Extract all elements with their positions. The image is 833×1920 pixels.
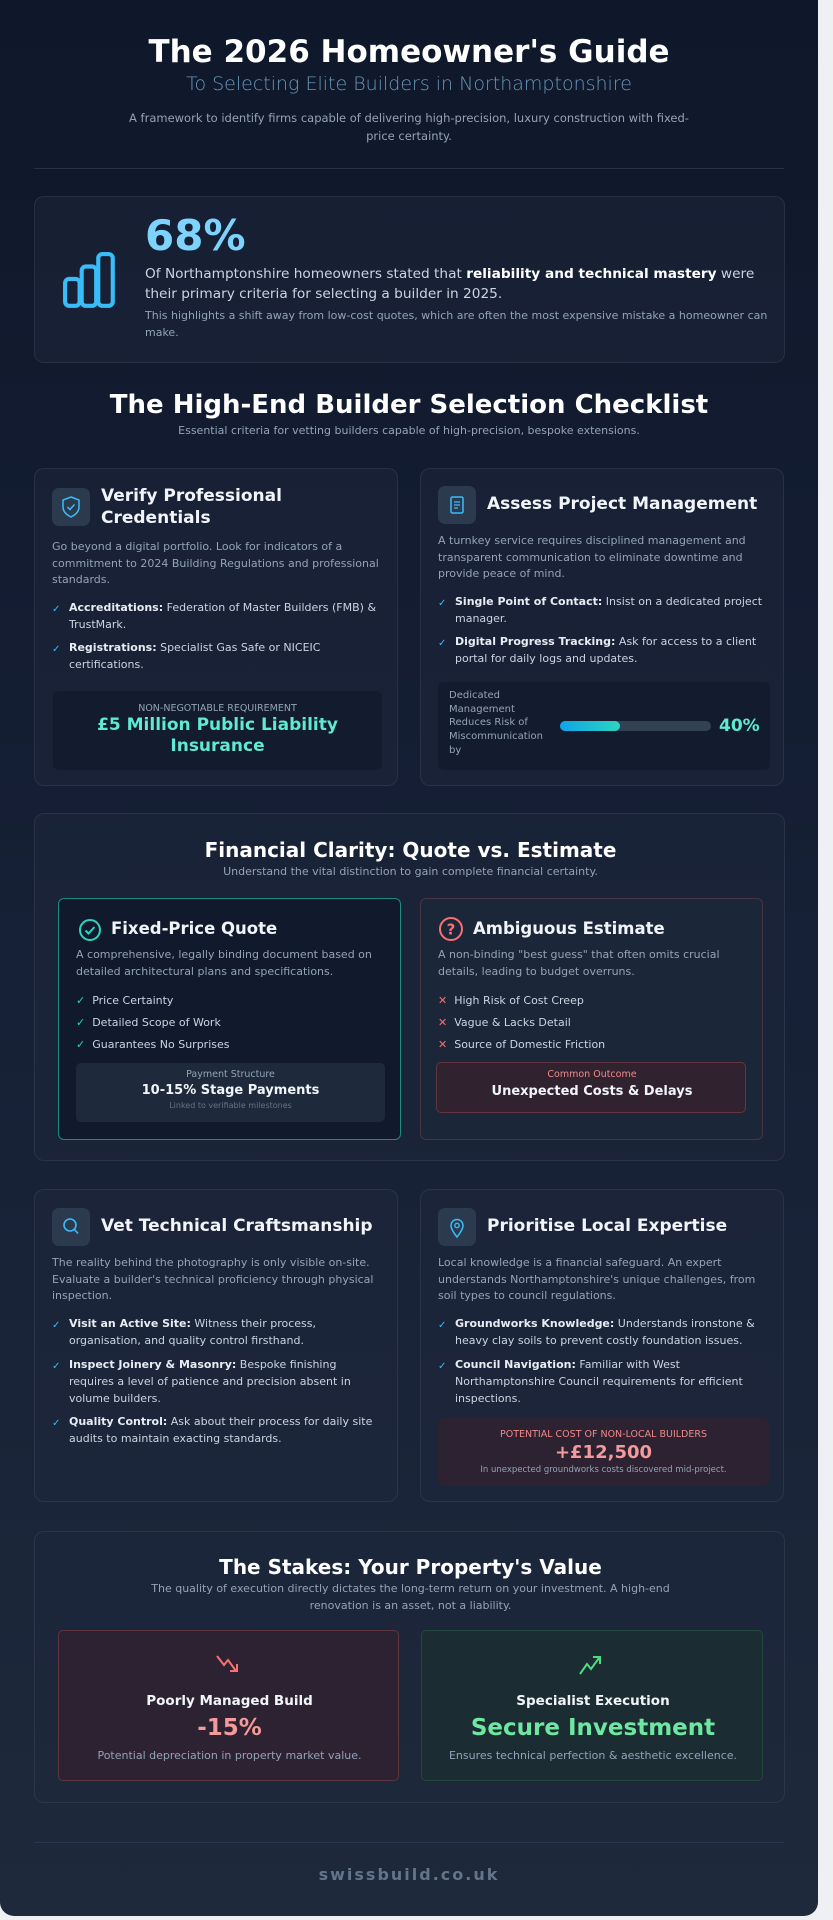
callout: payment structure: 10-15% Stage Payments [142, 1083, 319, 1098]
title: The 2026 Homeowner's Guide [148, 34, 670, 70]
card: ambiguous estimate: details, leading to budget overruns. [438, 965, 635, 978]
card: ambiguous estimate: A non-binding "best guess" that often omits crucial [438, 948, 720, 961]
icon: bar chart [63, 252, 115, 308]
callout: insurance: £5 Million Public Liability [97, 715, 338, 735]
callout: non-local cost [438, 1418, 769, 1486]
stat note: make. [145, 326, 179, 338]
bullets: audits to maintain exacting standards. [69, 1432, 282, 1445]
bullets: requires a level of patience and precision absent in [69, 1375, 351, 1388]
bullets: ✓ [52, 1320, 60, 1331]
bullets [438, 1317, 755, 1405]
bullets [438, 595, 762, 665]
heading: Verify Professional [101, 486, 282, 506]
callout: insurance: NON-NEGOTIABLE REQUIREMENT [138, 703, 297, 714]
card: specialist execution [421, 1630, 763, 1781]
card: ambiguous estimate: ✕ Vague & Lacks Detail [438, 1016, 571, 1029]
card: fixed-price quote: ✓ Price Certainty [76, 994, 173, 1007]
heading: The Stakes: Your Property's Value [219, 1555, 602, 1579]
chart: progress bar 40%: 40% [719, 716, 760, 736]
description [438, 1256, 755, 1302]
callout: common outcome: Common Outcome [547, 1069, 637, 1080]
bullets: organisation, and quality control firsthand. [69, 1334, 304, 1347]
bullets: Groundworks Knowledge: Understands ironstone & [455, 1317, 755, 1330]
callout: non-local cost: +£12,500 [555, 1442, 652, 1463]
heading: checklist: The High-End Builder Selection Checklist [110, 390, 708, 420]
bullets: heavy clay soils to prevent costly foundation issues. [455, 1334, 742, 1347]
card: fixed-price quote: Fixed-Price Quote [111, 919, 277, 938]
stat text [145, 266, 754, 302]
bullets: portal for daily logs and updates. [455, 652, 637, 665]
panel: project management [420, 468, 784, 786]
icon: trend down [216, 1655, 238, 1672]
bullets: Single Point of Contact: Insist on a dedicated project [455, 595, 762, 608]
heading: Prioritise Local Expertise [487, 1216, 727, 1236]
icon: magnifier [52, 1208, 90, 1246]
bullets: ✓ [438, 1361, 446, 1372]
chart: progress bar 40% [438, 682, 770, 770]
description: soil types to council regulations. [438, 1289, 616, 1302]
bullets [52, 1317, 372, 1445]
card: ambiguous estimate: ✕ Source of Domestic Friction [438, 1038, 605, 1051]
card: poorly managed: -15% [197, 1715, 262, 1741]
chart: progress bar 40%: Reduces Risk of [449, 717, 528, 728]
bullets: Digital Progress Tracking: Ask for access to a client [455, 635, 756, 648]
intro text [129, 111, 689, 143]
bullets: certifications. [69, 658, 144, 671]
description [52, 540, 379, 586]
heading: Assess Project Management [487, 494, 757, 514]
description: understands Northamptonshire's unique challenges, from [438, 1273, 755, 1286]
callout: non-local cost: POTENTIAL COST OF NON-LOCAL BUILDERS [500, 1429, 707, 1440]
bullets: ✓ [52, 604, 60, 615]
callout: insurance [53, 691, 382, 770]
stat note [144, 309, 767, 338]
icon: question circle: ? [447, 920, 455, 938]
subheading: Understand the vital distinction to gain complete financial certainty. [223, 865, 598, 878]
bullets: Council Navigation: Familiar with West [455, 1358, 680, 1371]
heading: Financial Clarity: Quote vs. Estimate [205, 838, 616, 862]
bullets: inspections. [455, 1392, 521, 1405]
description [52, 1256, 373, 1302]
card: ambiguous estimate: Ambiguous Estimate [473, 919, 665, 938]
subheading [151, 1582, 670, 1612]
icon: trend up [579, 1656, 601, 1675]
icon: question circle [439, 917, 463, 941]
chart: progress bar 40%: Management [449, 704, 515, 715]
card: specialist execution: Specialist Execution [516, 1693, 670, 1709]
bullets: Accreditations: Federation of Master Builders (FMB) & [69, 601, 376, 614]
heading [101, 486, 282, 528]
intro text: A framework to identify firms capable of delivering high-precision, luxury construction with fixed- [129, 111, 689, 125]
card: poorly managed: Potential depreciation in property market value. [97, 1749, 362, 1762]
card: fixed-price quote: detailed architectural plans and specifications. [76, 965, 333, 978]
bullets: Northamptonshire Council requirements for efficient [455, 1375, 743, 1388]
panel: verify credentials [34, 468, 398, 786]
icon: shield [52, 488, 90, 526]
intro text: price certainty. [366, 129, 452, 143]
description: Go beyond a digital portfolio. Look for indicators of a [52, 540, 342, 553]
description: standards. [52, 573, 110, 586]
panel: the stakes [34, 1531, 785, 1803]
callout: common outcome: Unexpected Costs & Delays [492, 1084, 692, 1099]
icon: check circle [79, 919, 101, 941]
heading: Credentials [101, 508, 211, 528]
panel: stat 68% [34, 196, 785, 363]
footer: swissbuild.co.uk [319, 1865, 499, 1884]
chart: progress bar 40%: by [449, 745, 461, 756]
bullets: TrustMark. [69, 618, 126, 631]
heading: Vet Technical Craftsmanship [101, 1216, 373, 1236]
chart: progress bar 40%: Miscommunication [449, 731, 543, 742]
bullets: ✓ [52, 644, 60, 655]
panel: local expertise [420, 1189, 784, 1502]
callout: payment structure: Linked to verifiable milestones [169, 1101, 292, 1110]
icon: map pin [438, 1208, 476, 1246]
bullets: ✓ [438, 1320, 446, 1331]
stat text: their primary criteria for selecting a builder in 2025. [145, 286, 502, 302]
bullets: manager. [455, 612, 507, 625]
bullets: ✓ [438, 598, 446, 609]
bullets: ✓ [52, 1361, 60, 1372]
bullets: ✓ [438, 638, 446, 649]
callout: payment structure [76, 1063, 385, 1122]
checklist subtitle: Essential criteria for vetting builders capable of high-precision, bespoke extensions. [178, 424, 640, 437]
panel: technical craftsmanship [34, 1189, 398, 1502]
card: fixed-price quote: A comprehensive, legally binding document based on [76, 948, 372, 961]
card: fixed-price quote: ✓ Guarantees No Surprises [76, 1038, 229, 1051]
bullets: volume builders. [69, 1392, 161, 1405]
description: The reality behind the photography is only visible on-site. [52, 1256, 370, 1269]
subheading: renovation is an asset, not a liability. [310, 1599, 511, 1612]
description: Evaluate a builder's technical proficiency through physical [52, 1273, 373, 1286]
description: inspection. [52, 1289, 112, 1302]
callout: common outcome [436, 1062, 746, 1113]
stat note: This highlights a shift away from low-cost quotes, which are often the most expensive mistake a homeowner can [145, 309, 767, 322]
description: provide peace of mind. [438, 567, 565, 580]
callout: non-local cost: In unexpected groundworks costs discovered mid-project. [480, 1465, 727, 1475]
description [438, 534, 746, 580]
description: Local knowledge is a financial safeguard. An expert [438, 1256, 721, 1269]
bullets: Quality Control: Ask about their process for daily site [69, 1415, 372, 1428]
card: fixed-price quote: ✓ Detailed Scope of Work [76, 1016, 221, 1029]
card: poorly managed: Poorly Managed Build [146, 1693, 313, 1709]
icon: document [438, 486, 476, 524]
card: poorly managed [58, 1630, 399, 1781]
callout: payment structure: Payment Structure [186, 1069, 275, 1080]
bullets: Visit an Active Site: Witness their process, [69, 1317, 316, 1330]
panel: financial clarity [34, 813, 785, 1161]
bullets: Registrations: Specialist Gas Safe or NICEIC [69, 641, 320, 654]
description: A turnkey service requires disciplined management and [438, 534, 746, 547]
callout: insurance: Insurance [170, 736, 265, 756]
chart: progress bar 40%: Dedicated [449, 690, 500, 701]
stat text: Of Northamptonshire homeowners stated that reliability and technical mastery were [145, 266, 754, 282]
bullets: ✓ [52, 1418, 60, 1429]
description: transparent communication to eliminate downtime and [438, 551, 743, 564]
description: commitment to 2024 Building Regulations and professional [52, 557, 379, 570]
stat number: 68% [145, 211, 246, 260]
card: ambiguous estimate [420, 898, 763, 1140]
bullets [52, 601, 376, 671]
card: specialist execution: Secure Investment [471, 1715, 715, 1741]
card: ambiguous estimate: ✕ High Risk of Cost Creep [438, 994, 584, 1007]
bullets: Inspect Joinery & Masonry: Bespoke finishing [69, 1358, 336, 1371]
subheading: The quality of execution directly dictates the long-term return on your investment. A high-end [151, 1582, 670, 1595]
subtitle: To Selecting Elite Builders in Northamptonshire [186, 73, 632, 95]
card: specialist execution: Ensures technical perfection & aesthetic excellence. [449, 1749, 737, 1762]
card: fixed-price quote [58, 898, 401, 1140]
